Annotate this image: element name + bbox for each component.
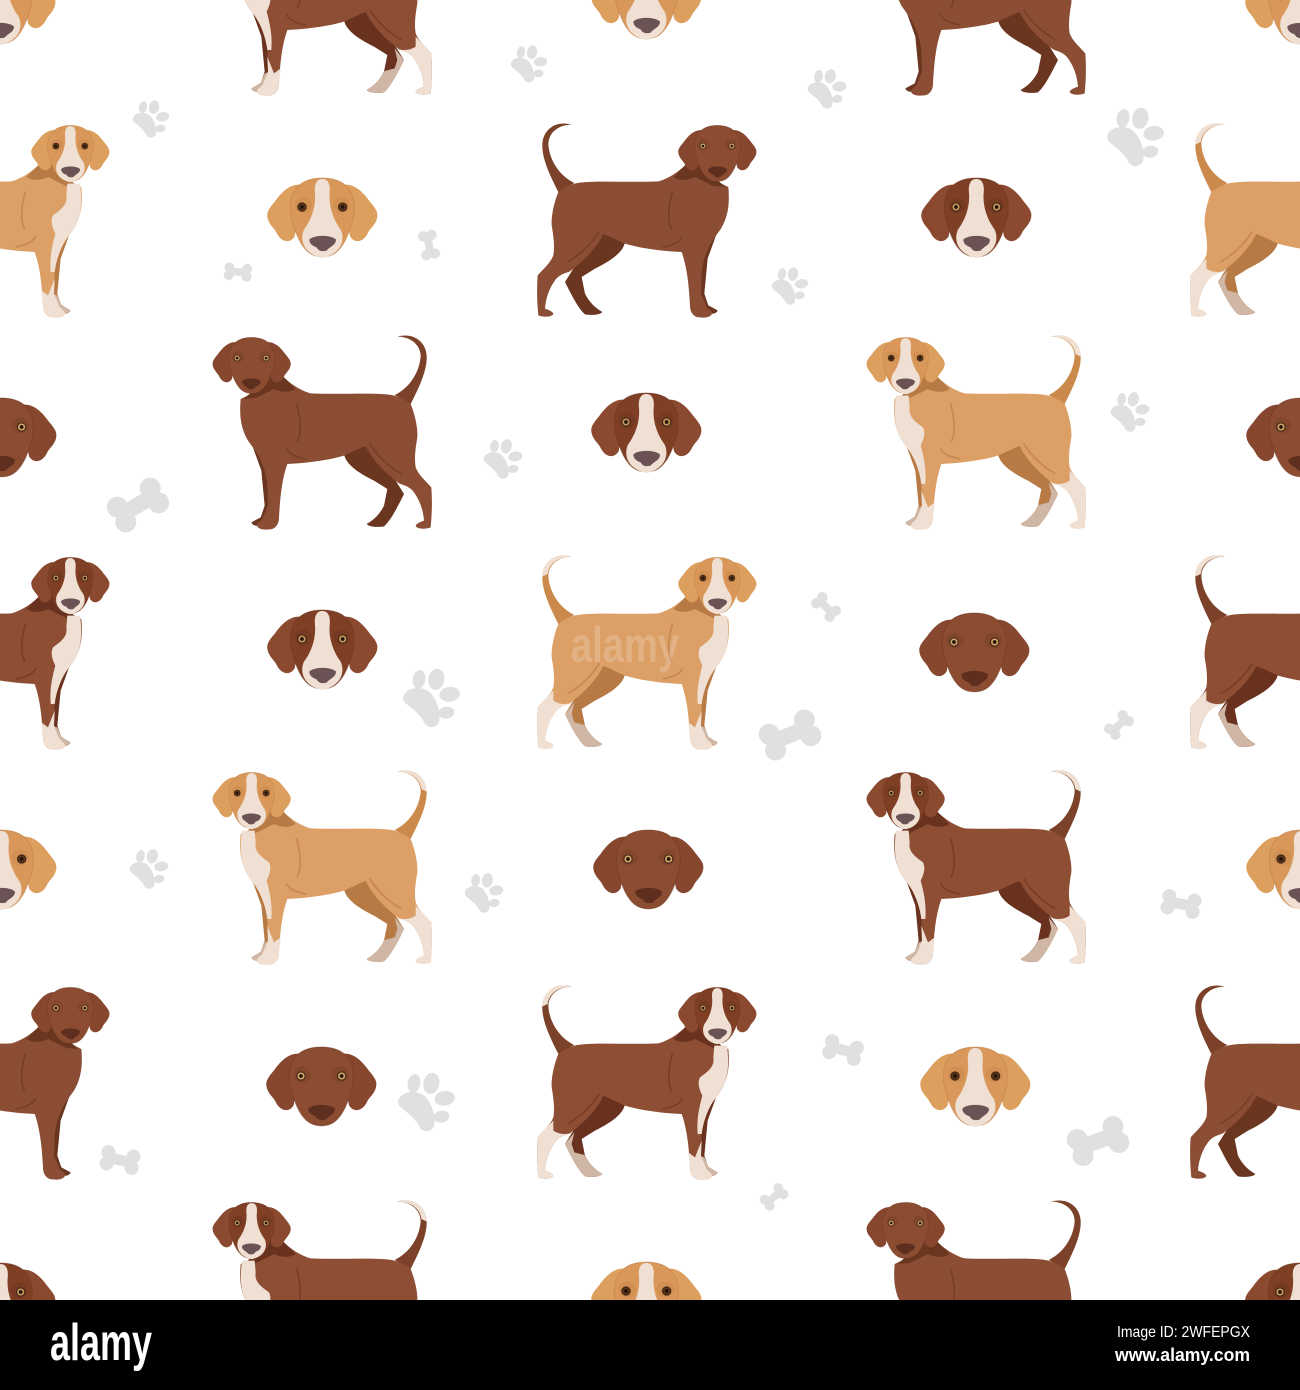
dog: fifth row tan <box>213 771 432 965</box>
website: www.alamy.com <box>1114 1345 1250 1365</box>
dog: sixth row liver center <box>537 986 756 1180</box>
paw prints <box>130 44 1165 1131</box>
dog: bottom row solid <box>867 1201 1086 1390</box>
head: tan <box>920 1047 1030 1127</box>
head: solid right edge <box>1246 398 1300 478</box>
head: liver <box>267 610 377 690</box>
dog: second row tan left edge <box>0 124 109 318</box>
footer bar <box>0 1300 1300 1390</box>
head: liver bottom left corner <box>0 1263 55 1343</box>
head: tan top right corner <box>1245 0 1300 45</box>
head: solid <box>919 613 1029 693</box>
dog: third row solid brown <box>213 336 432 530</box>
dog: bottom row liver <box>213 1201 432 1390</box>
image id: Image ID: 2WFEPGX <box>1117 1324 1250 1341</box>
dog: top row solid brown <box>867 0 1086 96</box>
dog: top row liver <box>213 0 432 96</box>
dog: fourth row liver right edge <box>1190 556 1300 750</box>
head: tan top left corner <box>0 0 55 45</box>
head: liver center <box>591 393 701 473</box>
dog: fifth row liver <box>867 771 1086 965</box>
head: tan top center <box>591 0 701 40</box>
dog: second row tan right edge <box>1190 124 1300 318</box>
head: liver bottom right corner <box>1245 1263 1300 1343</box>
head: tan right edge <box>1246 830 1300 910</box>
head: tan bottom center <box>591 1262 701 1342</box>
head: solid <box>266 1047 376 1127</box>
dog: sixth row solid right edge <box>1190 986 1300 1180</box>
head: tan left edge <box>0 830 56 910</box>
footer logo: alamy <box>50 1314 152 1372</box>
watermark: alamy <box>571 617 679 673</box>
bones <box>98 229 1203 1213</box>
dog: sixth row solid left edge <box>0 986 109 1180</box>
head: solid center <box>593 830 703 910</box>
dog: third row tan <box>867 336 1086 530</box>
head: liver <box>921 178 1031 258</box>
head: solid left edge <box>0 398 56 478</box>
dog: fourth row liver left edge <box>0 556 109 750</box>
head: tan <box>267 178 377 258</box>
dog: fourth row tan center <box>537 556 756 750</box>
dog: second row solid brown center <box>537 124 756 318</box>
